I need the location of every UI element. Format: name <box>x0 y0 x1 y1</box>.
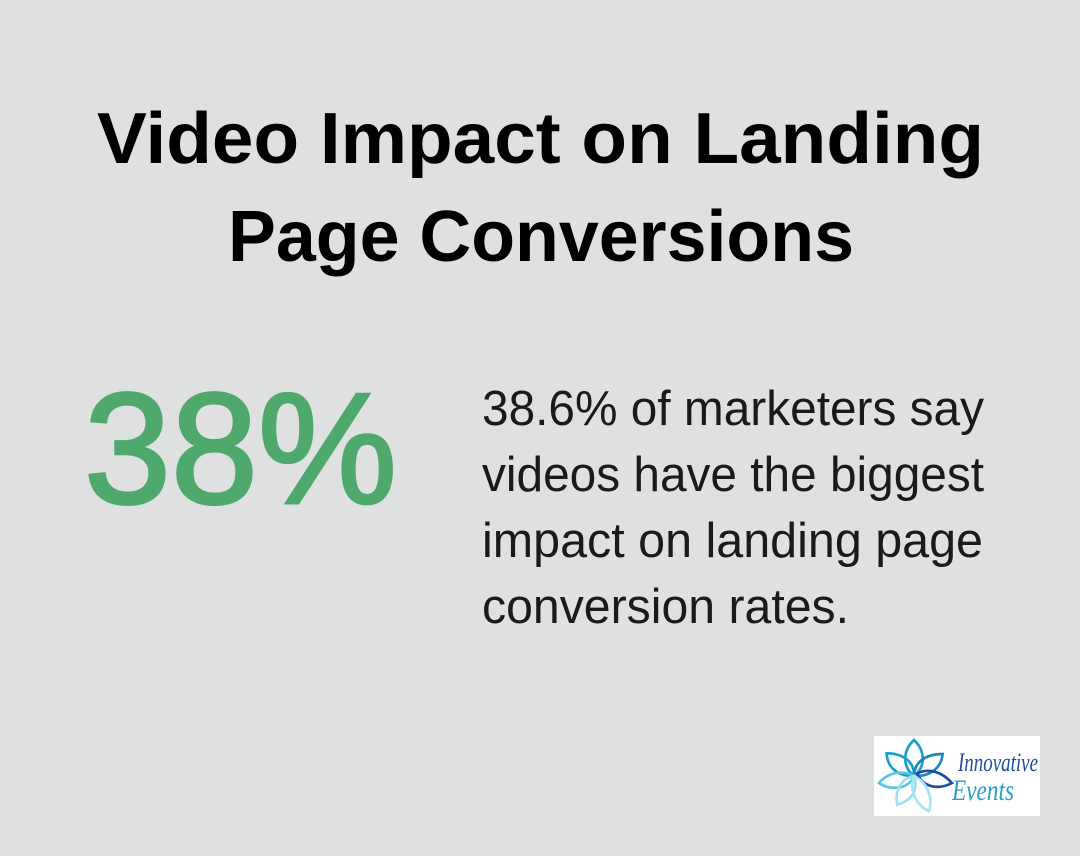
title: Page Conversions <box>228 197 854 277</box>
logo wordmark: Events <box>951 774 1014 807</box>
logo wordmark: Innovative <box>957 748 1038 777</box>
statistic description: conversion rates. <box>482 580 849 634</box>
title: Video Impact on Landing <box>97 99 984 179</box>
logo wordmark <box>951 748 1038 807</box>
big statistic: 38%: 38% <box>84 361 397 537</box>
title <box>97 99 984 277</box>
logo: Innovative Events <box>874 736 1040 816</box>
icon: flower petals <box>879 740 952 811</box>
statistic description <box>482 382 984 634</box>
statistic description: impact on landing page <box>482 514 983 568</box>
statistic description: 38.6% of marketers say <box>482 382 984 436</box>
statistic description: videos have the biggest <box>482 448 984 502</box>
